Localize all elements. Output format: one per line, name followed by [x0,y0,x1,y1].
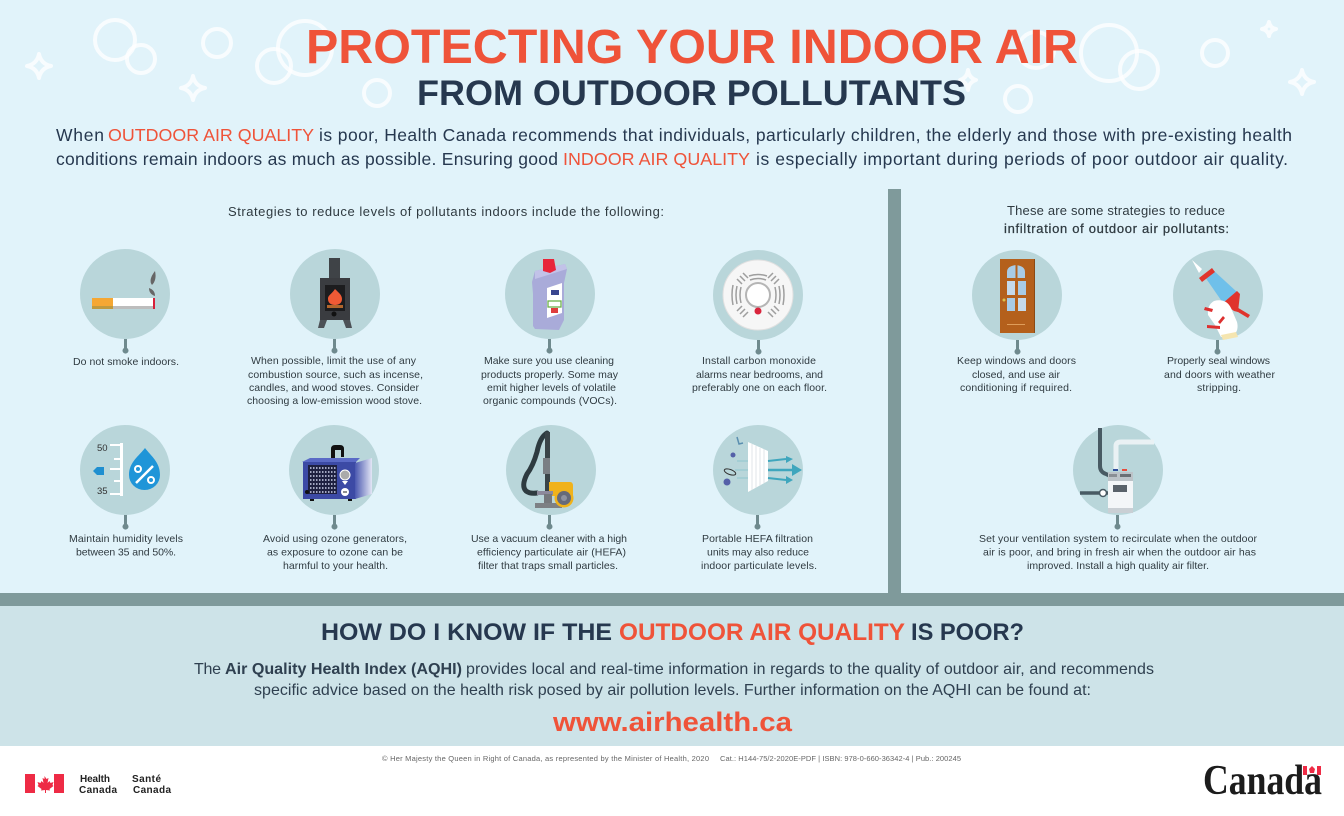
item: seal windows and doors: Properly seal windows [1167,355,1270,367]
item: ventilation system: air is poor, and bring in fresh air when the outdoor air has [983,546,1256,558]
item: keep windows closed: closed, and use air [972,369,1060,381]
AQHI description: specific advice based on the health risk posed by air pollution levels. Further information on the AQHI can be found at: [254,682,1091,699]
item: ventilation system [979,425,1258,572]
item: portable HEPA filtration: indoor particulate levels. [701,560,817,572]
logo: Health Canada signature: Santé [132,774,161,785]
item: ventilation system: Set your ventilation system to recirculate when the outdoor [979,533,1258,545]
item: combustion sources: choosing a low-emission wood stove. [247,395,422,407]
intro paragraph: When [56,125,104,145]
icon: wood stove [318,258,352,328]
item: carbon monoxide alarm: alarms near bedrooms, and [696,369,823,381]
item: portable HEPA filtration: Portable HEFA filtration [702,533,813,545]
heading: how do I know: HOW DO I KNOW IF THE [321,619,612,646]
item: portable HEPA filtration: units may also reduce [707,546,809,558]
item: seal windows and doors [1164,250,1276,394]
intro paragraph [56,125,1292,169]
item: HEPA vacuum: efficiency particulate air (HEFA) [477,546,626,558]
heading: how do I know [321,619,1024,646]
item: do not smoke [73,249,179,368]
intro paragraph: is especially important during periods of poor outdoor air quality. [756,149,1288,169]
item: ozone generators: as exposure to ozone can be [267,546,403,558]
decorative bubbles and sparkles [27,20,1314,112]
item: seal windows and doors: and doors with weather [1164,369,1276,381]
icon: humidity gauge and drop: 35 [97,486,108,497]
copyright line [382,754,961,763]
item: humidity [69,425,183,558]
AQHI description: Air Quality Health Index (AQHI) [225,661,462,678]
item: carbon monoxide alarm [692,250,827,394]
item: keep windows closed: conditioning if required. [960,382,1072,394]
item: humidity: between 35 and 50%. [76,546,176,558]
item: HEPA vacuum: Use a vacuum cleaner with a high [471,533,627,545]
horizontal divider [0,593,1344,606]
item: combustion sources [247,249,423,407]
icon: cigarette [92,271,156,309]
item: HEPA vacuum: filter that traps small particles. [478,560,618,572]
heading: indoor strategies: Strategies to reduce levels of pollutants indoors include the following: [228,204,664,219]
item: HEPA vacuum [471,425,627,572]
icon: HEPA filter with arrows [724,437,802,492]
item: humidity: Maintain humidity levels [69,533,183,545]
item: portable HEPA filtration [701,425,817,572]
item: combustion sources: candles, and wood stoves. Consider [249,382,420,394]
item: combustion sources: When possible, limit the use of any [251,355,417,367]
intro paragraph: is poor, Health Canada recommends that individuals, particularly children, the elderly and those with pre-existing health [319,125,1292,145]
item: ventilation system: improved. Install a high quality air filter. [1027,560,1209,572]
logo: Health Canada signature [25,774,171,796]
icon: humidity gauge and drop: 50 [97,443,108,454]
item: do not smoke: Do not smoke indoors. [73,356,179,368]
heading: infiltration strategies [1004,203,1229,236]
panel: how do I know [0,606,1344,746]
heading: infiltration strategies: infiltration of outdoor air pollutants: [1004,221,1229,236]
item: cleaning products: emit higher levels of volatile [487,382,616,394]
icon: smoke alarm [723,260,793,330]
intro paragraph: conditions remain indoors as much as possible. Ensuring good [56,149,558,169]
icon: humidity gauge and drop [93,443,160,497]
copyright line: Cat.: H144-75/2-2020E-PDF | ISBN: 978-0-660-36342-4 | Pub.: 200245 [720,754,961,763]
item: cleaning products: organic compounds (VOCs). [483,395,617,407]
item: seal windows and doors: stripping. [1197,382,1241,394]
item: combustion sources: combustion source, such as incense, [248,369,423,381]
icon: wooden door [1000,259,1035,333]
logo: Health Canada signature: Health [80,774,110,785]
icon: caulking gun in hand [1192,260,1250,340]
logo: Canada wordmark: Canada [1203,758,1322,804]
logo: Health Canada signature: Canada [79,785,117,796]
website link: www.airhealth.ca [552,707,793,737]
heading: infiltration strategies: These are some strategies to reduce [1007,203,1225,218]
icon: ozone generator [302,445,372,501]
icon: vacuum cleaner [524,432,574,508]
icon: furnace with ducts [1080,428,1154,513]
intro paragraph: INDOOR AIR QUALITY [563,149,750,169]
item: ozone generators: Avoid using ozone generators, [263,533,407,545]
title: PROTECTING YOUR INDOOR AIR [306,21,1078,74]
subtitle: FROM OUTDOOR POLLUTANTS [417,74,966,113]
item: carbon monoxide alarm: Install carbon monoxide [702,355,816,367]
copyright line: © Her Majesty the Queen in Right of Canada, as represented by the Minister of Health, 2020 [382,754,709,763]
logo: Health Canada signature: Canada [133,785,171,796]
heading: how do I know: IS POOR? [911,619,1024,646]
icon: cleaning bottle [532,259,567,330]
item: cleaning products [481,249,619,407]
intro paragraph: OUTDOOR AIR QUALITY [108,125,314,145]
panel: upper background [0,0,1344,593]
item: keep windows closed: Keep windows and doors [957,355,1076,367]
item: cleaning products: Make sure you use cleaning [484,355,614,367]
item: cleaning products: products properly. Some may [481,369,619,381]
AQHI description: The [194,661,221,678]
item: ozone generators: harmful to your health. [283,560,388,572]
vertical divider [888,189,901,593]
item: carbon monoxide alarm: preferably one on each floor. [692,382,827,394]
item: keep windows closed [957,250,1076,394]
AQHI description: provides local and real-time information in regards to the quality of outdoor air, and recommends [466,661,1154,678]
heading: how do I know: OUTDOOR AIR QUALITY [619,619,905,646]
item: ozone generators [263,425,407,572]
AQHI description [194,661,1154,699]
